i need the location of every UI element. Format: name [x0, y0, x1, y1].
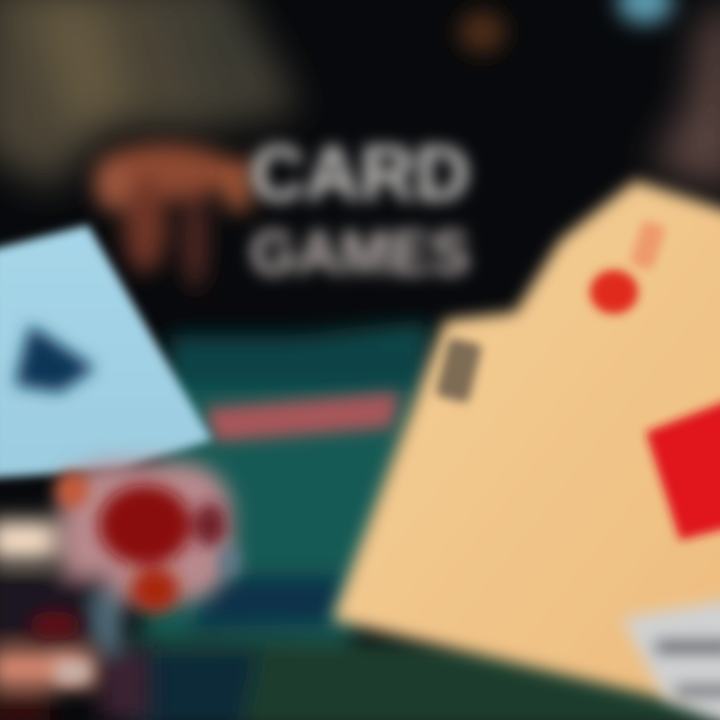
poker chips at bottom right [622, 598, 720, 720]
icon: red rank mark [629, 220, 666, 271]
table: red stripe [205, 392, 400, 442]
title: GAMES [250, 219, 470, 288]
icon: large red diamond pip [646, 396, 720, 540]
card: light blue card at left [0, 225, 212, 478]
card corner mark: dark rank [435, 337, 482, 403]
title [250, 129, 470, 288]
table: green felt [130, 325, 720, 720]
icon: dark spade pip [15, 325, 95, 392]
title: CARD [250, 129, 470, 217]
hand: fingers over the table [94, 144, 251, 290]
poker chips stack at bottom left [0, 462, 240, 720]
background: sleeve and arm at top left [0, 0, 300, 190]
icon: red diamond pip small [590, 270, 638, 314]
background: distant lights [458, 0, 673, 54]
background: right side figure [650, 0, 720, 190]
playing cards: fanned tan cards at right [332, 180, 720, 705]
